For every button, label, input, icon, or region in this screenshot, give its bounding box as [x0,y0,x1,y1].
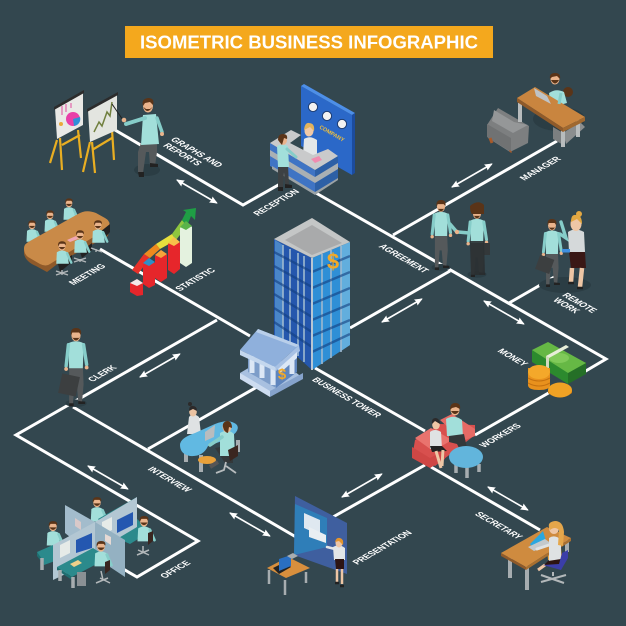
label: graphs and reports: GRAPHS AND [168,136,226,169]
double-headed arrows [85,160,530,540]
icon: business tower: $ [327,249,339,274]
icon: manager at desk with armchair [487,73,585,152]
title banner: ISOMETRIC BUSINESS INFOGRAPHIC [140,32,478,52]
icon: presentation screen [267,496,347,595]
label: agreement: AGREEMENT [376,242,432,275]
label: clerk: CLERK [85,363,120,383]
label: money: MONEY [495,347,531,368]
icon: agreement handshake [430,200,490,278]
label: interview: INTERVIEW [145,465,195,494]
flow connector lines [16,130,606,577]
label: secretary: SECRETARY [472,510,525,541]
icon: meeting table [24,198,110,275]
label: workers: WORKERS [477,422,524,449]
icon: reception desk with company wall [270,84,355,195]
icon: reception desk with company wall: COMPANY [318,125,345,144]
label: meeting: MEETING [66,262,108,287]
label: manager: MANAGER [517,155,564,182]
icon: bank building [240,329,303,397]
label: remote work: REMOTE [560,291,600,314]
icon: clerk with briefcase [58,328,89,407]
label: business tower: BUSINESS TOWER [310,376,384,419]
title banner [125,26,493,58]
icon: bank building: $ [278,366,287,383]
icon: remote work couple [535,211,591,293]
label: presentation: PRESENTATION [350,529,414,566]
label: reception: RECEPTION [251,188,302,217]
label: remote work [551,291,600,320]
icon: secretary at desk [501,521,571,590]
icon: graphs and reports boards with presenter [50,90,164,177]
label: remote work: WORK [551,296,583,315]
icon: money and coins [528,342,586,398]
icon: interview table [180,402,238,473]
icon: business tower [274,218,350,370]
icon: statistic bar chart [130,208,196,296]
icon: workers on sofa [412,403,483,478]
label: statistic: STATISTIC [173,266,218,292]
label: graphs and reports: REPORTS [161,142,205,167]
label: office: OFFICE [157,559,193,580]
icon: office cubicles [37,497,154,588]
